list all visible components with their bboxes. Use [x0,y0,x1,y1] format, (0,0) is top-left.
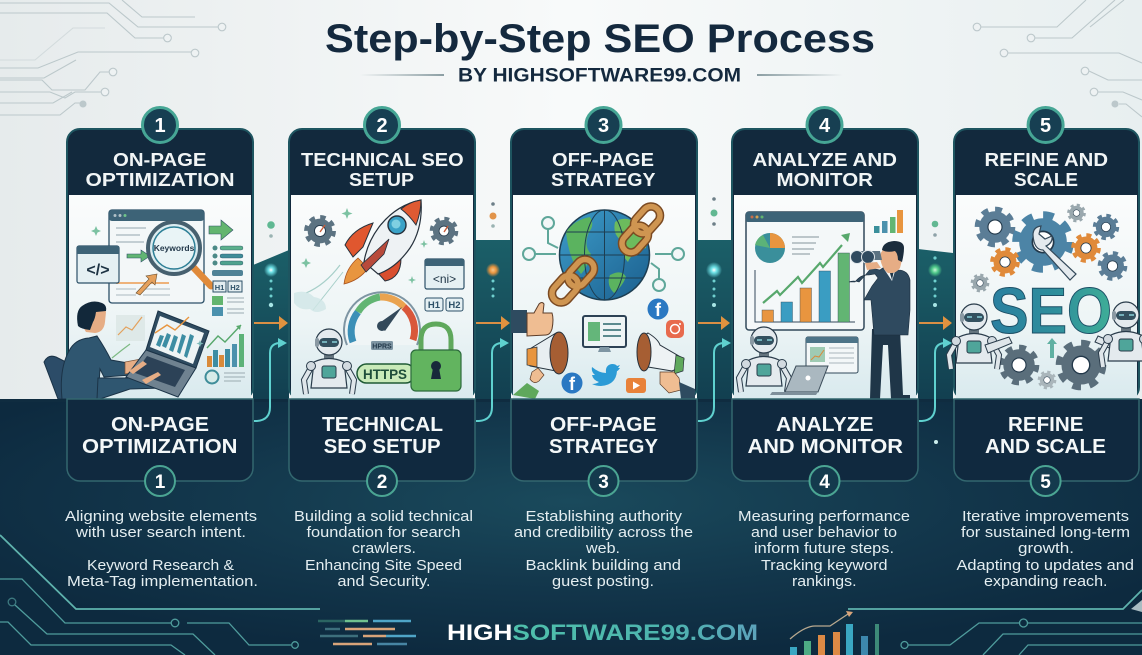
card 5 description: Adapting to updates and [956,557,1134,574]
card 5 heading: REFINE [1008,414,1084,436]
panel 2 heading: TECHNICAL SEO [301,149,464,170]
card 2 description: Building a solid technical [294,508,473,525]
panel 2 number badge [364,108,400,142]
footer speed lines [318,621,416,644]
panel 3 heading: OFF-PAGE [552,149,654,170]
footer brand name: HIGHSOFTWARE99.COM [447,620,758,645]
icon: speed gauge [344,292,420,350]
card 4 description [738,508,910,590]
icon: H1 H2 tags [425,298,463,311]
card 3 description: web. [585,540,620,557]
figure: man with binoculars [849,241,910,399]
card 5 number badge: 5 [1040,472,1051,493]
card 3 number badge [588,466,618,496]
card 4 heading: AND MONITOR [748,436,904,458]
icon: H1 H2 tags: H1 [428,300,441,311]
card 4 description: Tracking keyword [761,557,888,574]
card 1 heading: OPTIMIZATION [82,436,238,458]
icon: gears [307,218,456,244]
icon: globe [560,210,650,300]
card 3 heading: OFF-PAGE [550,414,656,436]
icon: code window: </> [86,262,110,279]
panel 1 heading: OPTIMIZATION [86,169,234,190]
card 1 description: Meta-Tag implementation. [67,573,258,590]
connector 3: arrows and dots [698,197,731,421]
background: light upper area [0,0,1142,400]
icon: code window [77,246,119,283]
card 3 description: Establishing authority [526,508,683,525]
lower card 5 [954,399,1139,590]
figure: person at laptop [44,302,165,399]
circuit decoration: top left [0,0,226,115]
icon: mini bar chart [874,210,903,233]
panel 2: technical seo setup [289,108,475,400]
card 1 description: Aligning website elements [65,508,257,525]
icon: https badge and padlock [357,324,461,391]
icon: facebook small: f [569,374,576,394]
card 2 description: crawlers. [352,540,416,557]
connector band segments between panels [253,240,953,400]
panel 4 heading [752,149,897,190]
panel 4 number badge: 4 [819,115,831,137]
icon: robot [739,327,789,392]
icon: https badge and padlock: HTTPS [363,366,407,382]
card 1 heading: ON-PAGE [111,414,209,436]
mask: lower dark band over illustrations [0,399,1142,402]
panel 4 frame [732,129,918,400]
panel 3 heading: STRATEGY [551,169,656,190]
panel 1 number badge [142,108,178,142]
card 2 number badge [367,466,397,496]
icon: network nodes [523,217,684,291]
card 4 description: rankings. [792,573,856,590]
card 2 heading [322,414,443,458]
lower card 2 [289,399,475,590]
icon: growth bars [91,226,245,384]
panel 5 heading: REFINE AND [984,149,1108,170]
icon: laptop with chart [126,311,209,397]
icon: speed gauge: HPRS [372,344,392,350]
icon: code window: <ni> [433,272,456,286]
card 2 description: Enhancing Site Speed [305,557,462,574]
icon: facebook large [648,298,668,320]
icon: right robot [1095,302,1142,367]
icon: twitter bird [592,364,620,386]
icon: H1 H2 tags: H2 [448,300,461,311]
card 5 description [956,508,1134,590]
connector 4: arrows and dots [919,221,952,444]
icon: left megaphone [513,332,568,399]
card 3 number badge: 3 [598,472,609,493]
icon: small report window [806,337,858,373]
card 3 description: guest posting. [552,573,654,590]
card 1 number badge [145,466,175,496]
icon: gear cluster with wrench [972,205,1125,291]
card 5 number badge [1031,466,1061,496]
card 4 heading: ANALYZE [776,414,874,436]
circuit decoration: top right [973,0,1142,117]
icon: right megaphone [637,333,695,399]
card 1 heading [82,414,238,458]
icon: code window [425,259,464,289]
connector 2: arrows and dots [476,202,510,421]
card 3 frame [511,399,697,481]
icon: side checklist: H2 [230,283,240,292]
card 1 frame [67,399,253,481]
icon: browser with keyword magnifier: Keywords [154,243,195,253]
panel 1 number badge: 1 [154,115,166,137]
card 3 description: Backlink building and [526,557,681,574]
card 4 description: and user behavior to [751,524,897,541]
panel 1 illustration background [69,195,251,399]
panel 5 heading: SCALE [1014,169,1078,190]
card 3 description [514,508,693,590]
icon: side checklist: H1 [215,283,224,292]
chart window: analytics dashboard [746,212,864,330]
card 3 description: and credibility across the [514,524,693,541]
panel 3 illustration background [513,195,695,399]
card 2 description: and Security. [338,573,430,590]
panel 1 heading [86,149,234,190]
panel 2 frame [289,129,475,400]
card 2 description: foundation for search [306,524,460,541]
card 5 description: Iterative improvements [962,508,1129,525]
icon: side checklist [209,220,244,316]
panel 3 frame [511,129,697,400]
panel 5 frame [954,129,1139,400]
lower card 1 [65,399,258,590]
panel 3 heading [551,149,656,190]
card 5 description: growth. [1018,540,1074,557]
panel 5 number badge: 5 [1040,115,1051,137]
panel 4 heading: ANALYZE AND [752,149,897,170]
icon: facebook large: f [655,300,662,320]
icon: left robot [949,304,1012,369]
card 1 description: Keyword Research & [87,557,234,574]
card 4 description: Measuring performance [738,508,910,525]
card 3 heading: STRATEGY [549,436,659,458]
icon: chain links [548,203,664,306]
lower card 4 [732,399,918,590]
icon: thumbs up hand [511,302,553,336]
panel 1 frame [67,129,253,400]
panel 4: analyze and monitor [732,108,918,400]
card 3 heading [549,414,659,458]
panel 3 number badge: 3 [598,115,609,137]
card 4 number badge: 4 [819,472,830,493]
card 4 frame [732,399,918,481]
circuit decoration: bottom right [848,590,1142,655]
big SEO lettering: SEO [990,274,1112,347]
icon: instagram [666,320,684,338]
panel 1: on-page optimization [44,108,253,400]
background: dark lower band [0,399,1142,655]
card 1 description: with user search intent. [75,524,246,541]
panel 3: off-page strategy [511,108,697,400]
card 5 heading: AND SCALE [985,436,1106,458]
card 2 number badge: 2 [377,472,387,493]
card 5 heading [985,414,1106,458]
card 5 description: for sustained long-term [961,524,1130,541]
card 5 frame [954,399,1139,481]
icon: browser with keyword magnifier [109,210,211,303]
lower card 3 [511,399,697,590]
panel 2 illustration background [291,195,473,399]
panel 2 heading [301,149,464,190]
card 4 heading [748,414,904,458]
card 5 description: expanding reach. [984,573,1108,590]
icon: monitor [583,316,626,352]
panel 3 number badge [586,108,621,142]
panel 5: refine and scale [949,108,1142,400]
card 4 number badge [810,466,840,496]
footer growth chart [790,611,879,655]
panel 4 illustration background [734,195,916,399]
panel 4 heading: MONITOR [776,169,873,190]
panel 1 heading: ON-PAGE [113,149,206,170]
subtitle with rules: BY HIGHSOFTWARE99.COM [458,64,741,86]
icon: lower gears [1002,338,1102,388]
icon: robot [304,329,354,394]
card 1 number badge: 1 [155,472,166,493]
panel 5 heading [984,149,1108,190]
card 2 frame [289,399,475,481]
panel 2 heading: SETUP [349,169,414,190]
card 2 heading: SEO SETUP [324,436,441,458]
icon: facebook small [562,372,582,394]
icon: youtube [626,378,646,393]
card 4 description: inform future steps. [754,540,894,557]
panel 5 number badge [1028,108,1063,142]
icon: rocket [294,200,428,312]
card 2 heading: TECHNICAL [322,414,443,436]
icon: laptop [770,366,828,395]
card 2 description [294,508,473,590]
connector 1: arrows and dots [254,221,288,421]
panel 2 number badge: 2 [376,115,388,137]
panel 5 illustration background [956,195,1137,399]
title: Step-by-Step SEO Process [325,17,875,61]
card 1 description [65,508,258,590]
circuit decoration: bottom left [0,535,320,655]
panel 4 number badge [807,108,842,142]
